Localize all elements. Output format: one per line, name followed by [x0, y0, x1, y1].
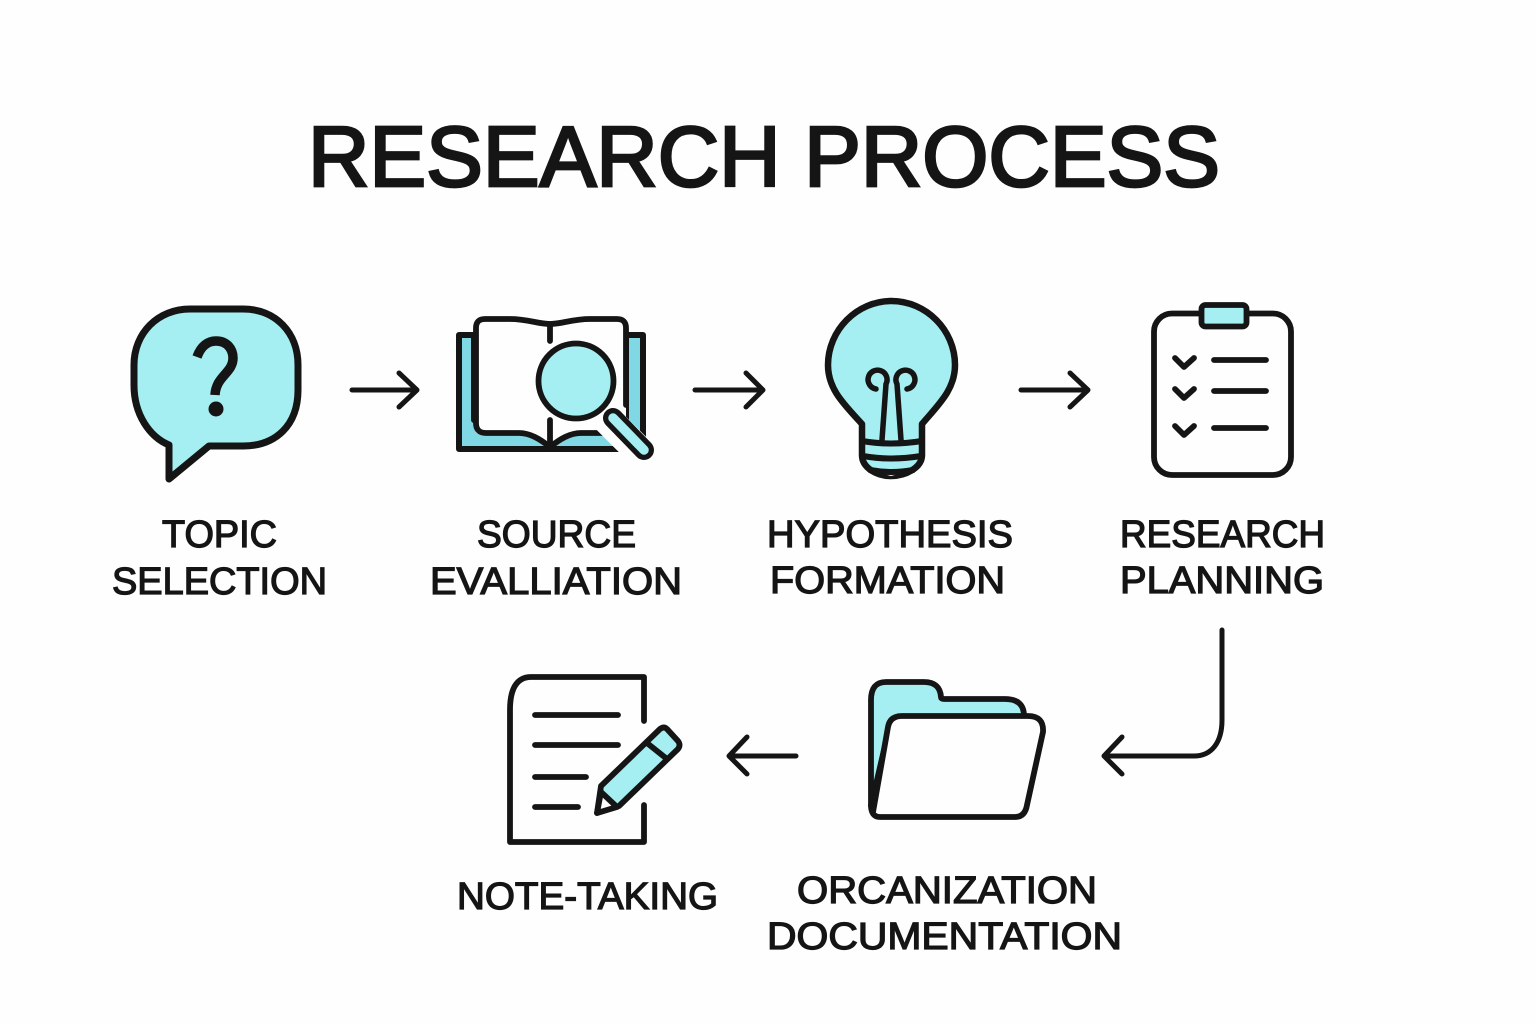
icon: open book with magnifier [459, 319, 658, 470]
arrow: hypothesis to planning [1021, 373, 1088, 407]
arrow: topic to source [352, 373, 417, 407]
label: organization documentation: DOCUMENTATION [767, 916, 1122, 958]
label: research planning [1120, 514, 1325, 602]
icon: clipboard checklist [1154, 305, 1291, 475]
icon: speech bubble with question mark [134, 309, 298, 479]
arrow: organization to note-taking [729, 737, 796, 774]
label: research planning: RESEARCH [1120, 514, 1325, 556]
label: research planning: PLANNING [1120, 560, 1324, 602]
label: hypothesis formation: FORMATION [770, 560, 1005, 602]
label: note-taking: NOTE-TAKING [457, 876, 718, 918]
arrow: source to hypothesis [695, 373, 763, 407]
label: organization documentation [767, 870, 1122, 958]
label: organization documentation: ORCANIZATION [797, 870, 1097, 912]
label: hypothesis formation [767, 514, 1013, 602]
icon: folder [871, 682, 1043, 817]
icon: document with pencil [510, 677, 680, 842]
label: source evalliation: SOURCE [477, 514, 636, 556]
label: topic selection: TOPIC [162, 514, 277, 556]
label: source evalliation [430, 514, 682, 603]
label: topic selection: SELECTION [112, 561, 327, 603]
label: hypothesis formation: HYPOTHESIS [767, 514, 1013, 556]
arrow: planning bends to organization [1104, 630, 1222, 774]
icon: light bulb [828, 301, 955, 476]
title: RESEARCH PROCESS [308, 110, 1220, 205]
label: topic selection [112, 514, 327, 603]
label: source evalliation: EVALLIATION [430, 561, 682, 603]
